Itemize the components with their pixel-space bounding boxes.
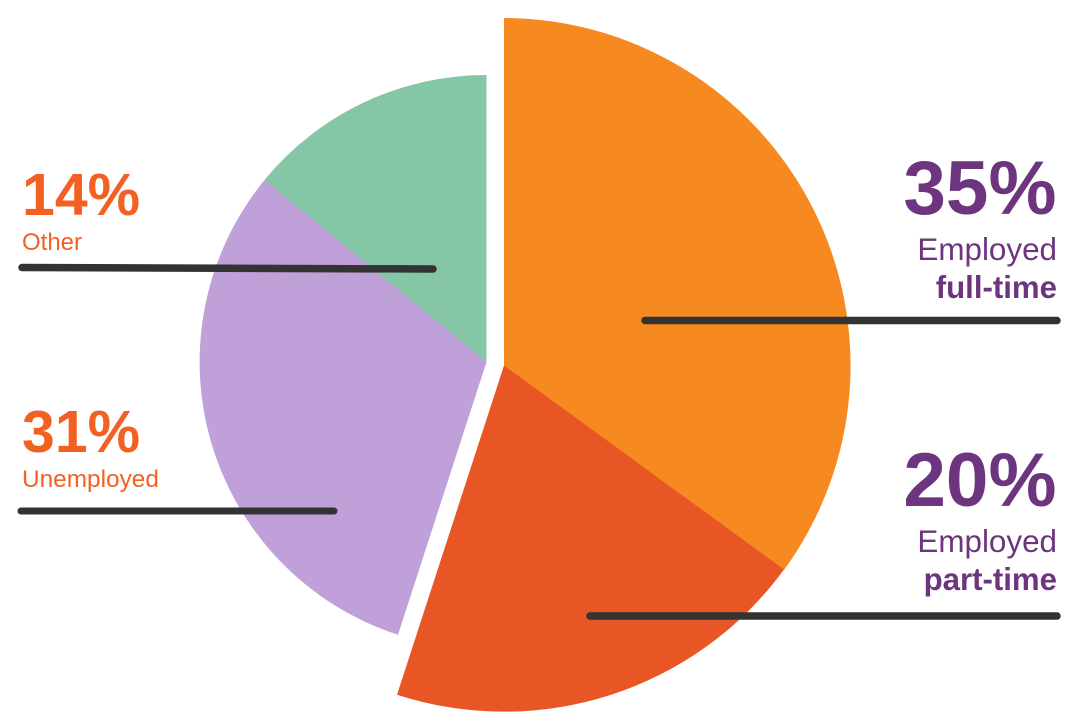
label: 20% employed part-time: [903, 438, 1057, 597]
pie slice: employed full-time 35%: [504, 18, 851, 570]
leader line: part-time: [590, 612, 1057, 620]
label: 35% employed full-time: Employed: [917, 232, 1057, 267]
label: 14% other: 14%: [22, 162, 140, 228]
label: 20% employed part-time: part-time: [924, 562, 1057, 597]
label: 20% employed part-time: Employed: [917, 524, 1057, 559]
label: 31% unemployed: 31%: [22, 399, 140, 465]
label: 35% employed full-time: [903, 146, 1057, 305]
leader line: unemployed: [21, 508, 334, 514]
label: 14% other: Other: [22, 229, 82, 256]
pie slice: unemployed 31%: [200, 179, 486, 635]
pie slice: employed part-time 20%: [397, 366, 784, 712]
label: 35% employed full-time: full-time: [936, 270, 1057, 305]
label: 31% unemployed: [22, 399, 159, 493]
leader line: full-time: [645, 317, 1057, 324]
label: 20% employed part-time: 20%: [903, 438, 1056, 523]
pie slice: other 14%: [264, 75, 486, 362]
label: 35% employed full-time: 35%: [903, 146, 1056, 231]
leader line: other: [22, 268, 433, 269]
label: 31% unemployed: Unemployed: [22, 466, 159, 493]
